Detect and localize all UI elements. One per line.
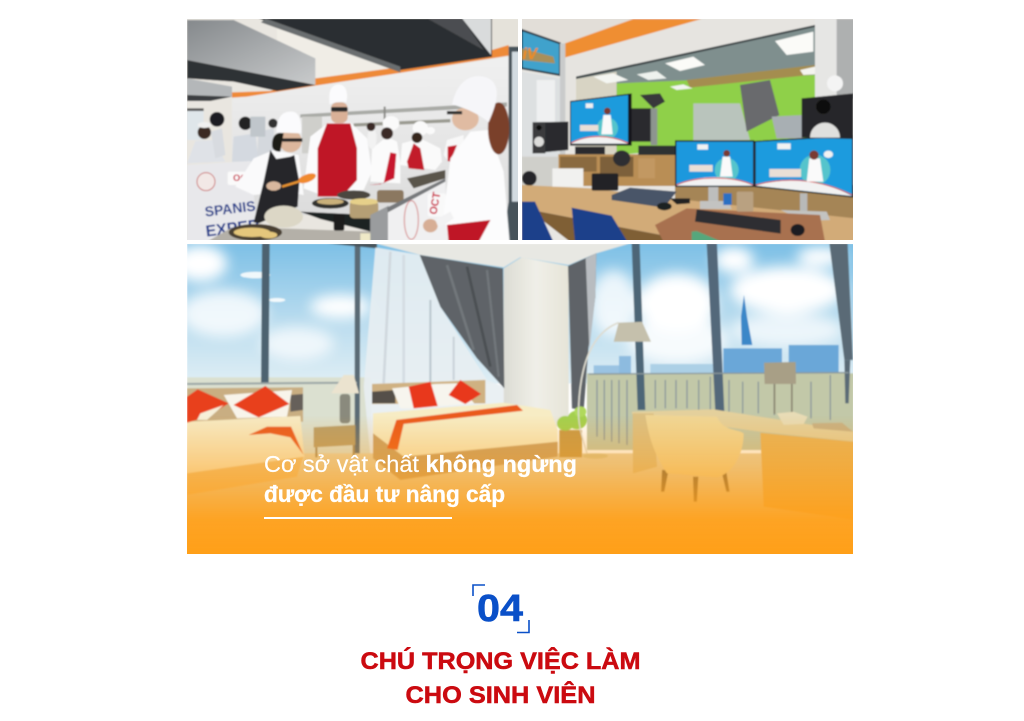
stove, pans and food	[207, 190, 404, 242]
right wall with camera	[815, 19, 837, 99]
window frames	[261, 243, 270, 383]
caption on photo	[264, 451, 577, 507]
section heading: CHÚ TRỌNG VIỆC LÀM	[360, 647, 640, 675]
wall column	[504, 257, 569, 427]
monitor right	[754, 135, 853, 221]
background students	[188, 140, 224, 162]
photo: students cooking in training kitchen: OC	[233, 173, 247, 183]
left counter	[187, 161, 259, 242]
right window	[506, 46, 518, 240]
floor	[187, 452, 828, 518]
dark grey curtain left	[420, 255, 504, 388]
photo: students cooking in training kitchen: EXPER	[205, 217, 261, 241]
right counter	[370, 206, 389, 242]
range hood left	[187, 20, 315, 85]
background shelf	[300, 102, 507, 118]
distant ground and city	[187, 377, 370, 461]
clouds	[174, 245, 844, 363]
photo: students cooking in training kitchen: SPANIS	[204, 198, 256, 220]
studio speaker right	[802, 93, 853, 139]
desk surface	[522, 185, 855, 242]
infographic canvas	[187, 19, 853, 704]
blue chairs	[522, 202, 722, 242]
bed left	[187, 386, 304, 495]
background cooks	[370, 137, 400, 183]
photo: media studio control room	[520, 15, 857, 245]
monitor left	[570, 93, 632, 146]
caption on photo: Cơ sở vật chất không ngừng	[264, 451, 577, 477]
woman in foreground	[423, 76, 510, 242]
studio speaker left	[533, 122, 568, 153]
range hood centre	[259, 18, 492, 70]
nightstand and table lamp	[314, 375, 359, 457]
caption on photo: được đầu tư nâng cấp	[264, 481, 505, 507]
ceiling	[375, 243, 630, 267]
audio mixer	[612, 188, 690, 210]
photo: students cooking in training kitchen: OCT	[427, 191, 443, 216]
section heading: CHO SINH VIÊN	[406, 681, 596, 709]
balcony railing	[589, 373, 849, 445]
bed right	[372, 380, 558, 480]
desk with chair and lamp	[632, 362, 855, 520]
potted plant	[557, 406, 587, 457]
left glass panel	[522, 30, 560, 75]
white sheer curtain	[364, 247, 504, 457]
orange wall band	[232, 45, 509, 98]
control room window	[579, 26, 816, 84]
chef instructor	[304, 84, 372, 197]
desk shelf and back wall	[558, 154, 677, 186]
photo: students cooking in training kitchen	[185, 15, 522, 245]
photo: dormitory room with city view	[174, 243, 857, 560]
woman cooking	[235, 112, 317, 223]
floor lamp	[578, 322, 651, 459]
section number with corner brackets: 04	[477, 588, 523, 630]
monitor middle	[675, 140, 754, 209]
section heading	[360, 647, 640, 709]
orange gradient overlay	[187, 415, 853, 554]
section number with corner brackets	[473, 585, 529, 632]
photo: media studio control room: iV	[523, 46, 539, 63]
dark grey curtain right	[568, 253, 596, 410]
caption underline	[264, 517, 452, 519]
desk mat, keyboard and mouse	[655, 192, 825, 242]
